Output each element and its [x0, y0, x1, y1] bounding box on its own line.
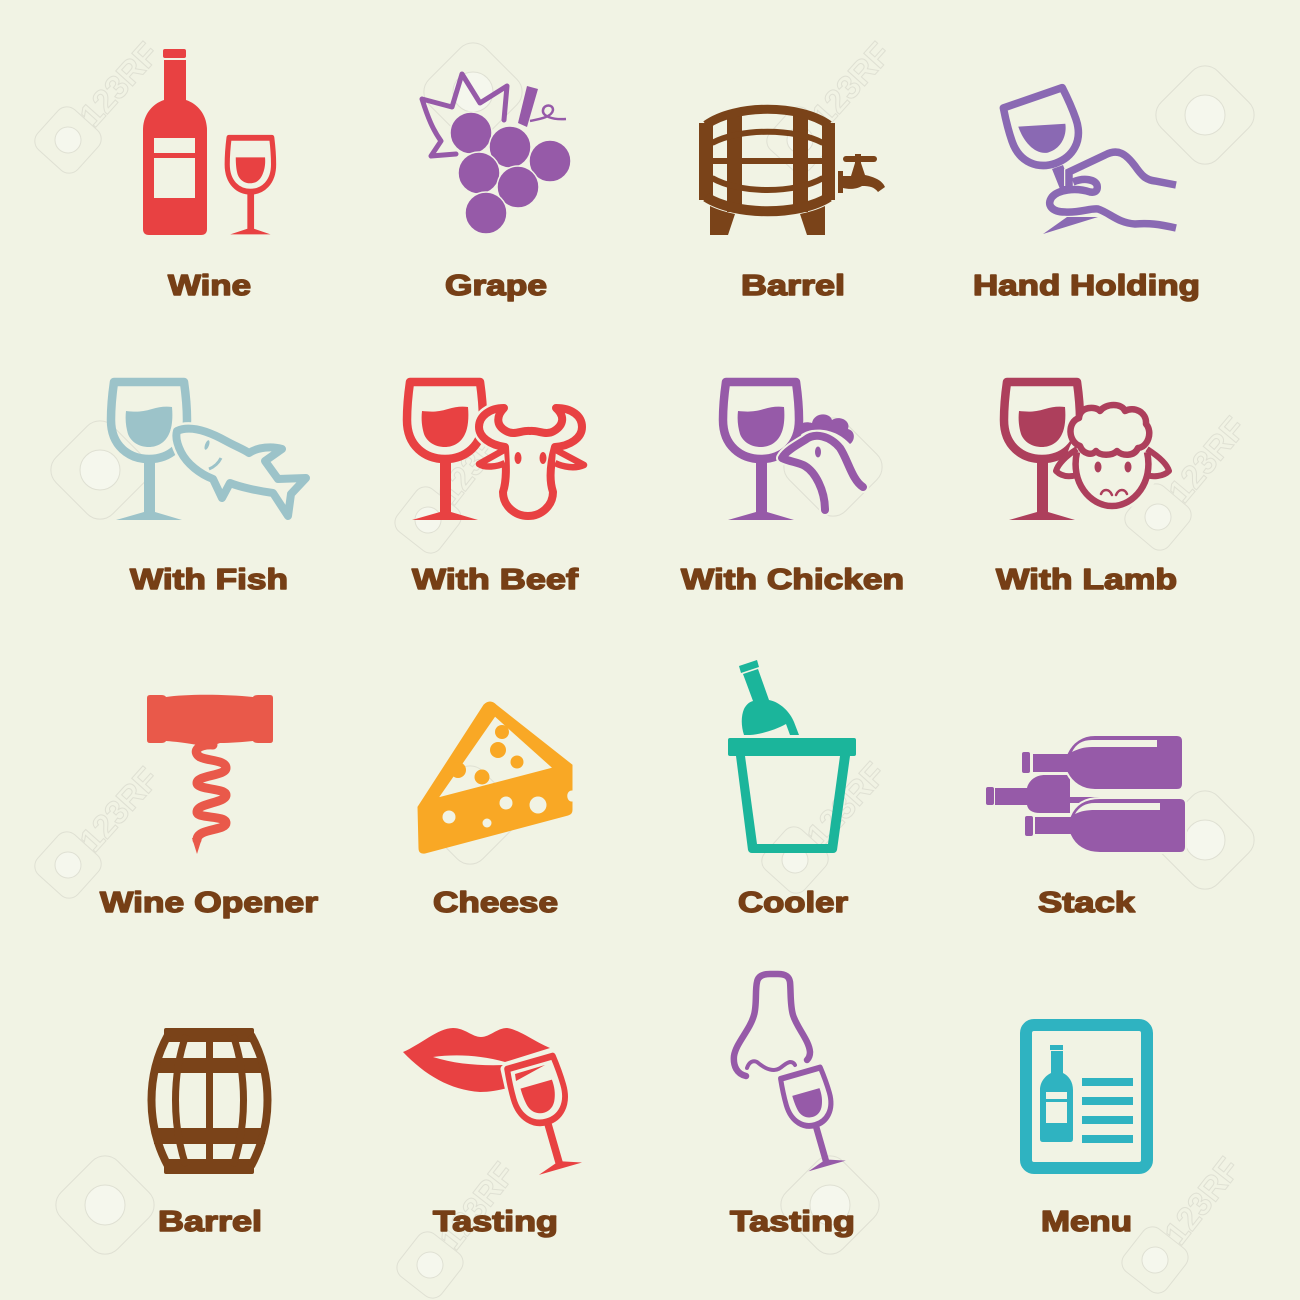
text: 123RF [432, 1155, 522, 1256]
label: with fish: With Fish [130, 564, 288, 596]
label: with lamb: With Lamb [996, 564, 1177, 596]
panel: grape [422, 74, 571, 302]
icon: corkscrew [147, 695, 273, 854]
panel: with lamb [996, 382, 1177, 596]
icon: glass and lamb [1004, 382, 1169, 520]
label: wine opener: Wine Opener [100, 887, 318, 919]
panel: with beef [407, 382, 584, 596]
text: 123RF [804, 35, 898, 133]
text: 123RF [1157, 1150, 1247, 1251]
panel: wine [143, 49, 274, 302]
text: 123RF [430, 410, 520, 511]
panel: with chicken [681, 382, 904, 596]
icon: nose and glass [734, 974, 849, 1172]
label: barrel: Barrel [158, 1206, 262, 1238]
icon: glass and cow head [407, 382, 584, 520]
panel: cooler [728, 660, 856, 919]
icon: barrel [152, 1028, 268, 1174]
icon: grape bunch [422, 74, 571, 234]
icon: barrel with tap [699, 109, 885, 235]
text: 123RF [72, 760, 166, 858]
icon: glass and fish [111, 382, 306, 520]
icon: glass and chicken [723, 382, 863, 520]
icon: stacked bottles [986, 735, 1186, 853]
panel: cheese [418, 702, 572, 919]
icon: lips and glass [403, 1028, 585, 1176]
label: wine: Wine [168, 270, 251, 302]
panel: hand holding [973, 87, 1200, 302]
panel: tasting nose [730, 974, 855, 1238]
panel: wine opener [100, 695, 318, 919]
label: hand holding: Hand Holding [973, 270, 1200, 302]
label: menu: Menu [1041, 1206, 1132, 1238]
text: 123RF [1161, 410, 1253, 509]
label: tasting: Tasting [433, 1206, 558, 1238]
icon: ice bucket with bottle [728, 660, 856, 853]
icon: cheese wedge [418, 702, 572, 853]
panel: stack [986, 735, 1186, 919]
label: with beef: With Beef [412, 564, 578, 596]
label: tasting: Tasting [730, 1206, 855, 1238]
text: 123RF [72, 35, 166, 133]
label: barrel: Barrel [741, 270, 845, 302]
label: with chicken: With Chicken [681, 564, 904, 596]
icon: hand holding glass [1001, 87, 1176, 234]
text: 123RF [799, 755, 893, 853]
panel: tasting lips [403, 1028, 585, 1238]
label: cooler: Cooler [738, 887, 848, 919]
icon: menu card [1026, 1025, 1147, 1168]
icon: small wine glass [227, 138, 274, 234]
panel: with fish [111, 382, 306, 596]
label: grape: Grape [445, 270, 547, 302]
label: cheese: Cheese [433, 887, 558, 919]
panel: menu [1026, 1025, 1147, 1238]
panel: barrel with tap [699, 109, 885, 302]
label: stack: Stack [1038, 887, 1136, 919]
icon: wine bottle [143, 49, 207, 235]
panel: barrel [152, 1028, 268, 1238]
